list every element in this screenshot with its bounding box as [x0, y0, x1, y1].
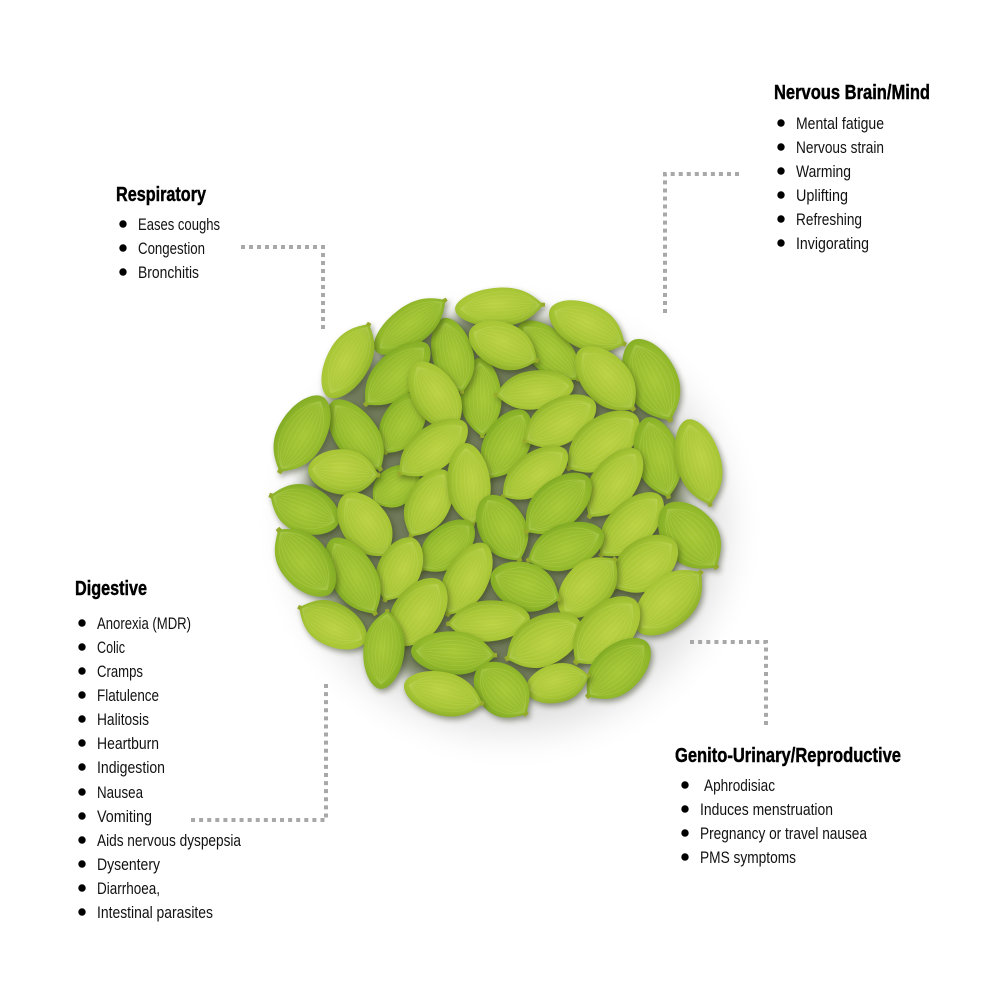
heading: respiratory: Respiratory [116, 184, 207, 206]
list: genito-urinary/reproductive: Aphrodisiac [704, 776, 775, 795]
list: digestive: Aids nervous dyspepsia [97, 831, 241, 850]
dark fill between pods [305, 315, 685, 695]
cardamom pods cluster [258, 283, 738, 733]
heading: digestive: Digestive [75, 578, 147, 600]
list: digestive: Intestinal parasites [97, 903, 213, 922]
list: nervous brain/mind: Nervous strain [796, 138, 884, 157]
list: respiratory [119, 215, 220, 282]
list: genito-urinary/reproductive: PMS symptoms [700, 848, 796, 867]
list: genito-urinary/reproductive: Pregnancy or travel nausea [700, 824, 867, 843]
panel: respiratory [116, 184, 220, 282]
list: digestive: Indigestion [97, 758, 165, 777]
connector: genito-urinary [690, 642, 766, 725]
list: nervous brain/mind [777, 114, 884, 253]
list: digestive: Dysentery [97, 855, 160, 874]
background shadow under the pods [295, 320, 725, 730]
list: digestive: Vomiting [97, 807, 152, 826]
list: digestive: Heartburn [97, 734, 159, 753]
connector: respiratory [241, 247, 323, 329]
list: respiratory: Bronchitis [138, 263, 199, 282]
list: digestive: Diarrhoea, [97, 879, 160, 898]
list: nervous brain/mind: Invigorating [796, 234, 869, 253]
list: respiratory: Congestion [138, 239, 205, 258]
list: digestive: Anorexia (MDR) [97, 614, 191, 633]
list: digestive: Cramps [97, 662, 143, 681]
panel: genito-urinary/reproductive [675, 745, 901, 867]
list: nervous brain/mind: Mental fatigue [796, 114, 884, 133]
connector: nervous brain/mind [665, 174, 739, 313]
connector: digestive [191, 684, 326, 820]
list: nervous brain/mind: Warming [796, 162, 851, 181]
list: respiratory: Eases coughs [138, 215, 220, 234]
list: digestive: Flatulence [97, 686, 159, 705]
panel: digestive [75, 578, 241, 922]
list: nervous brain/mind: Uplifting [796, 186, 848, 205]
heading: genito-urinary/reproductive: Genito-Urinary/Reproductive [675, 745, 901, 767]
list: genito-urinary/reproductive [681, 776, 867, 867]
list: digestive: Halitosis [97, 710, 149, 729]
heading: nervous brain/mind: Nervous Brain/Mind [774, 82, 930, 104]
list: genito-urinary/reproductive: Induces menstruation [700, 800, 833, 819]
list: digestive [78, 614, 241, 922]
list: nervous brain/mind: Refreshing [796, 210, 862, 229]
list: digestive: Colic [97, 638, 125, 657]
list: digestive: Nausea [97, 783, 143, 802]
panel: nervous brain/mind [774, 82, 930, 253]
